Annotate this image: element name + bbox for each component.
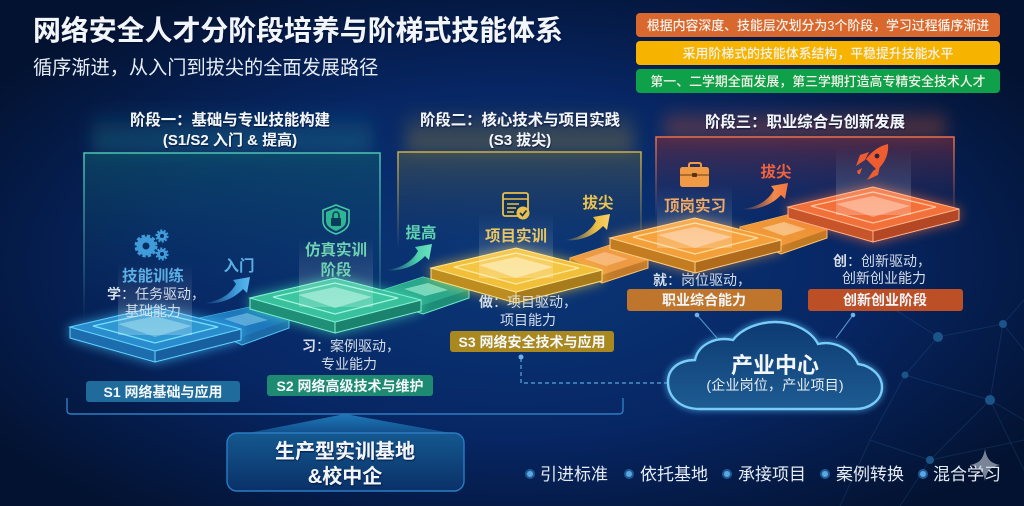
pill: ladder (636, 41, 1000, 65)
watermark star (970, 449, 1000, 481)
do text: 做：项目驱动， (479, 294, 577, 310)
learn text: 基础能力 (125, 303, 181, 319)
stage one heading: (S1/S2 入门 & 提高) (163, 131, 297, 149)
label: innovation: 创新创业阶段 (843, 292, 927, 308)
label: career (627, 289, 782, 311)
training base callout (227, 414, 464, 491)
cloud subtitle: (企业岗位，产业项目) (706, 377, 844, 394)
create text: 创新创业能力 (842, 270, 926, 286)
connector: S1 to S2 (200, 307, 289, 345)
platform labels: 拔尖 (760, 163, 792, 181)
stage three heading: 阶段三：职业综合与创新发展 (705, 112, 905, 131)
connector: S3 to S4 (570, 245, 648, 283)
icon: rocket (856, 144, 888, 180)
bullet: base: 依托基地 (640, 465, 708, 484)
panel: stage two (398, 110, 641, 252)
platform labels: 技能训练 (122, 266, 184, 285)
label: S2: S2 网络高级技术与维护 (276, 378, 424, 394)
do text: 项目能力 (500, 312, 556, 328)
platform labels (122, 163, 792, 285)
pill: stages (636, 13, 1000, 37)
pill: semesters: 第一、二学期全面发展，第三学期打造高专精安全技术人才 (650, 74, 986, 89)
practice bullets (526, 465, 1001, 484)
panel: stage three (656, 110, 954, 225)
do text (479, 294, 577, 328)
panel: stage one (84, 110, 380, 323)
arrow: 入门 (203, 277, 250, 303)
stage two heading: 阶段二：核心技术与项目实践 (420, 110, 620, 129)
icon: briefcase (680, 163, 709, 187)
platform labels: 提高 (405, 223, 437, 242)
create text: 创：创新驱动， (833, 253, 931, 269)
title: 网络安全人才分阶段培养与阶梯式技能体系 (33, 15, 563, 46)
cloud title: 产业中心 (731, 353, 819, 378)
connector: S2 to S3 (380, 277, 469, 314)
summary pills (636, 13, 1000, 93)
stage two heading (420, 110, 620, 149)
practice text: 习：案例驱动， (302, 338, 400, 354)
bullet: standards: 引进标准 (540, 465, 608, 484)
light pillars (118, 147, 911, 335)
label: S1 (86, 381, 240, 402)
learn text (107, 286, 205, 319)
stage one heading: 阶段一：基础与专业技能构建 (130, 110, 330, 129)
callout text: &校中企 (308, 464, 382, 488)
stage one heading (130, 110, 330, 149)
pill: stages: 根据内容深度、技能层次划分为3个阶段，学习过程循序渐进 (647, 18, 989, 33)
icon: gears (136, 230, 168, 260)
platform: S4 (610, 218, 781, 273)
pill: ladder: 采用阶梯式的技能体系结构，平稳提升技能水平 (683, 46, 953, 61)
connector: S4 to S5 (740, 215, 827, 254)
callout text (275, 439, 415, 488)
practice text: 专业能力 (321, 356, 377, 372)
icon: project document (503, 193, 530, 220)
job text: 就：岗位驱动， (653, 272, 751, 288)
arrow: 拔尖 S3 (563, 214, 610, 240)
network pattern (840, 300, 1024, 506)
platform: S2 (250, 278, 421, 333)
platform labels: 顶岗实习 (664, 196, 726, 215)
platform labels: 仿真实训 (305, 240, 367, 259)
platform labels: 阶段 (320, 260, 352, 279)
label: S2 (267, 375, 433, 396)
label: S3 (450, 331, 614, 352)
bullet: blended: 混合学习 (933, 465, 1001, 484)
create text (833, 253, 931, 286)
subtitle: 循序渐进，从入门到拔尖的全面发展路径 (33, 57, 378, 79)
label: career: 职业综合能力 (662, 292, 746, 308)
practice text (302, 338, 400, 372)
label: S3: S3 网络安全技术与应用 (458, 334, 606, 350)
callout text: 生产型实训基地 (275, 439, 415, 463)
platform: S3 (431, 248, 602, 303)
label: S1: S1 网络基础与应用 (103, 384, 223, 400)
bullet: projects: 承接项目 (738, 465, 806, 484)
learn text: 学：任务驱动， (107, 286, 205, 302)
arrow: 拔尖 stage three (741, 183, 788, 209)
bracket (67, 398, 623, 414)
icon: shield (323, 205, 349, 234)
stage two heading: (S3 拔尖) (489, 131, 551, 149)
dashed link S3 to cloud (518, 354, 668, 383)
platform labels: 项目实训 (485, 226, 547, 245)
label: innovation (808, 289, 963, 311)
pill: semesters (636, 69, 1000, 93)
bullet: cases: 案例转换 (836, 465, 904, 484)
links to cloud (695, 313, 855, 338)
cloud: industry center (668, 322, 882, 409)
platform labels: 入门 (223, 257, 255, 275)
platform labels: 拔尖 (582, 194, 614, 212)
platform: S5 (788, 187, 959, 242)
arrow: 提高 (385, 244, 432, 270)
platform: S1 (70, 307, 241, 362)
